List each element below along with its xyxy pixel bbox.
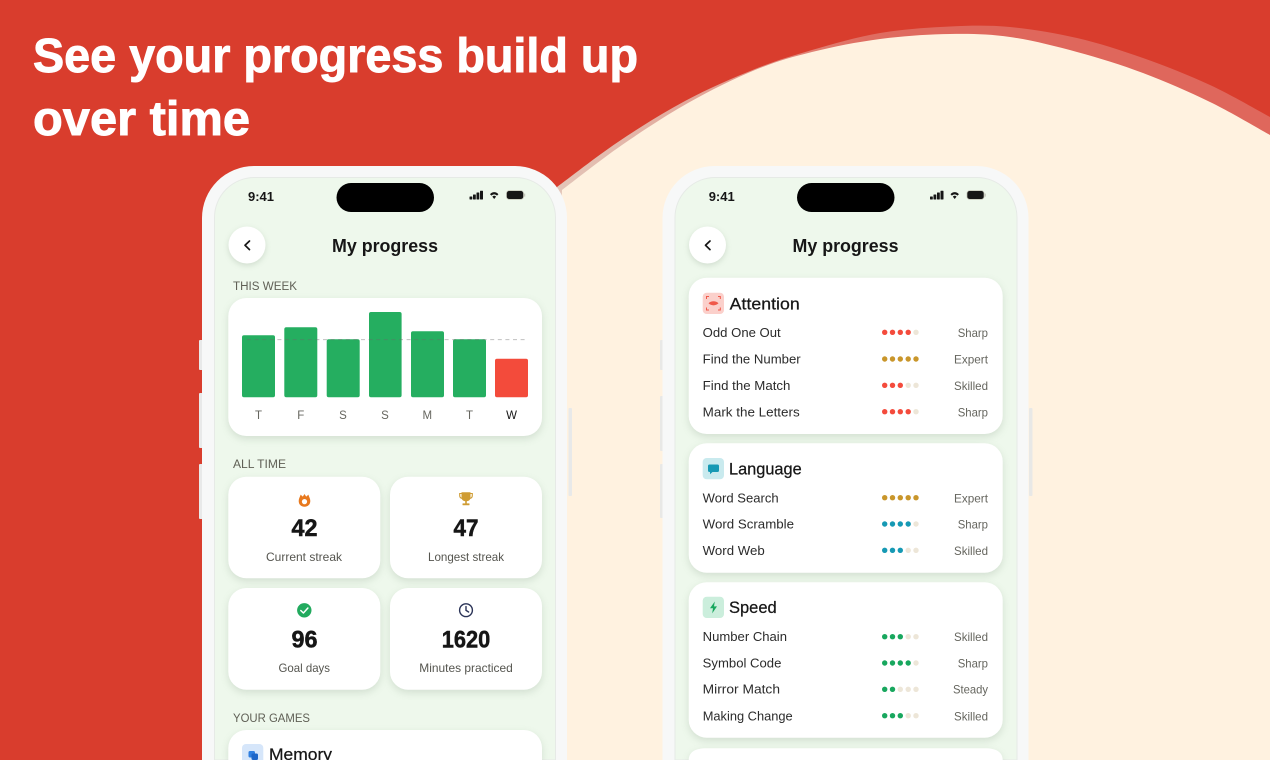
back button xyxy=(228,226,266,264)
icon: memory cards xyxy=(248,751,258,760)
panel: language xyxy=(689,443,1003,573)
row: odd one out xyxy=(703,325,988,340)
screen title: My progress xyxy=(792,236,898,256)
day labels: T xyxy=(255,410,262,422)
row: mark the letters: Mark the Letters xyxy=(703,404,800,419)
stat: minutes practiced xyxy=(390,588,542,690)
title: See your progress build up xyxy=(33,30,638,83)
phone: game skills xyxy=(660,166,1032,760)
row: word scramble: Word Scramble xyxy=(703,517,794,532)
panel: attention xyxy=(689,278,1003,434)
decorative curve band xyxy=(557,26,1270,220)
row: making change xyxy=(703,708,988,723)
panel: next category (cropped) xyxy=(689,748,1003,760)
stat: longest streak xyxy=(390,477,542,578)
day labels: M xyxy=(423,410,432,422)
stat: goal days xyxy=(228,588,380,690)
row: word search xyxy=(703,490,989,505)
title: over time xyxy=(33,93,250,146)
stat: longest streak: 47 xyxy=(454,515,478,542)
day labels: S xyxy=(381,410,389,422)
row: odd one out: Sharp xyxy=(958,326,988,340)
icon: memory xyxy=(242,744,263,760)
day labels: W xyxy=(506,410,517,422)
row: word web: Word Web xyxy=(703,543,765,558)
section heading: all time: ALL TIME xyxy=(233,459,286,471)
row: find the number: Expert xyxy=(954,352,989,366)
row: number chain: Number Chain xyxy=(703,629,787,644)
phone side buttons xyxy=(199,340,572,519)
day labels: T xyxy=(466,410,473,422)
stat: current streak: 42 xyxy=(292,515,318,542)
row: find the match xyxy=(703,378,988,393)
row: mirror match: Mirror Match xyxy=(703,682,780,697)
stat: current streak: Current streak xyxy=(266,550,343,564)
stat: goal days: Goal days xyxy=(278,661,330,675)
phone frame xyxy=(202,166,567,760)
day labels: S xyxy=(339,410,347,422)
bars xyxy=(242,312,528,397)
row: word web xyxy=(703,543,988,558)
goal line xyxy=(247,339,527,341)
row: odd one out: Odd One Out xyxy=(703,325,781,340)
section heading: your games: YOUR GAMES xyxy=(233,713,310,725)
panel: attention: Attention xyxy=(730,294,800,313)
phone screen xyxy=(675,178,1017,760)
stat: longest streak: Longest streak xyxy=(428,550,505,564)
row: mark the letters: Sharp xyxy=(958,405,988,419)
stat: minutes practiced: 1620 xyxy=(442,626,490,653)
panel: speed xyxy=(689,582,1003,738)
row: mark the letters xyxy=(703,404,988,419)
stat: current streak xyxy=(228,477,380,578)
back button xyxy=(689,226,726,264)
row: making change: Skilled xyxy=(954,709,988,723)
row: mirror match: Steady xyxy=(953,683,988,697)
status icons xyxy=(470,191,525,200)
row: symbol code xyxy=(703,655,988,670)
icon: clock xyxy=(460,604,472,617)
day labels: F xyxy=(297,410,304,422)
phone side buttons xyxy=(660,340,1032,518)
phone: overall progress xyxy=(199,166,572,760)
row: find the number xyxy=(703,351,989,366)
row: symbol code: Sharp xyxy=(958,656,988,670)
row: word scramble xyxy=(703,517,988,532)
section heading: this week: THIS WEEK xyxy=(233,281,297,293)
status icons xyxy=(930,191,986,200)
row: mirror match xyxy=(703,682,988,697)
icon: attention xyxy=(703,293,724,314)
screen title: My progress xyxy=(332,236,438,256)
row: making change: Making Change xyxy=(703,708,793,723)
panel: weekly chart xyxy=(228,298,542,436)
icon: language xyxy=(703,458,724,479)
icon: flame xyxy=(299,494,310,507)
panel: speed: Speed xyxy=(729,598,777,617)
status bar time: 9:41 xyxy=(709,189,735,204)
day labels xyxy=(255,410,517,422)
icon: check xyxy=(297,603,311,618)
dynamic island xyxy=(797,183,894,212)
status bar time: 9:41 xyxy=(248,189,274,204)
row: symbol code: Symbol Code xyxy=(703,655,781,670)
row: find the match: Find the Match xyxy=(703,378,790,393)
stat: minutes practiced: Minutes practiced xyxy=(419,661,513,675)
row: word web: Skilled xyxy=(954,544,988,558)
row: find the match: Skilled xyxy=(954,379,988,393)
row: number chain xyxy=(703,629,988,644)
row: number chain: Skilled xyxy=(954,630,988,644)
row: word search: Word Search xyxy=(703,490,779,505)
panel: memory xyxy=(228,730,542,760)
dynamic island xyxy=(336,183,434,212)
row: word search: Expert xyxy=(954,491,989,505)
icon: speed xyxy=(703,597,724,618)
panel: language: Language xyxy=(729,459,802,478)
row: find the number: Find the Number xyxy=(703,351,801,366)
cream curved background xyxy=(540,34,1270,760)
phone screen xyxy=(214,178,556,760)
icon: trophy xyxy=(460,492,472,505)
phone frame xyxy=(662,166,1028,760)
row: word scramble: Sharp xyxy=(958,518,988,532)
title xyxy=(33,30,638,146)
stat: goal days: 96 xyxy=(292,626,318,653)
